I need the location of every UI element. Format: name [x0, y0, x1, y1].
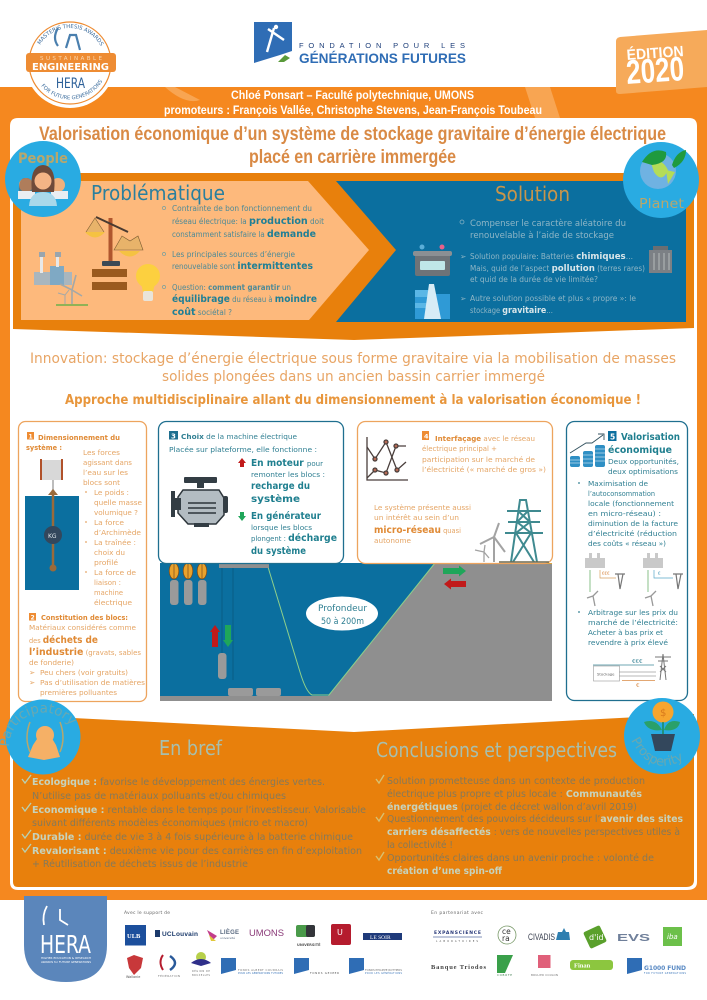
support logos: Avec le support de	[124, 910, 170, 916]
blocks constitution text: Matériaux considérés comme	[29, 623, 136, 632]
arbitrage text: Arbitrage sur les prix du	[588, 608, 678, 617]
icon: light bulb	[136, 264, 160, 301]
text: en bref list: Economique : rentable dans le temps pour l’investisseur. Valorisable	[32, 805, 366, 816]
support logos: UNIVERSITÉ	[297, 942, 321, 947]
heading text: Valorisation	[621, 432, 680, 443]
subheading: multidisciplinary approach: Approche multidisciplinaire allant du dimensionnement à la valorisation économique !	[65, 393, 641, 408]
heading text: 5	[610, 432, 615, 442]
mini diagram: storage arbitrage	[593, 654, 671, 689]
icon: battery	[413, 244, 452, 276]
forces text: électrique	[94, 598, 132, 607]
support logos: FÉDÉRATION	[158, 973, 180, 978]
solution text: Compenser le caractère aléatoire du	[470, 218, 626, 229]
icon: coin stacks	[570, 434, 605, 467]
icon: prosperity badge: $	[660, 708, 666, 719]
problem text	[162, 204, 324, 318]
icon: people badge	[5, 141, 81, 217]
heading text: économique	[608, 444, 672, 456]
motor mode text: En moteur pour	[251, 458, 324, 469]
generator mode text	[251, 511, 337, 557]
support logos: POUR LES GÉNÉRATIONS FUTURES	[238, 972, 284, 975]
forces text: machine	[94, 588, 123, 597]
partner logos: Banque Triodos	[431, 964, 486, 971]
blocks constitution text	[29, 613, 145, 697]
icon: people badge: People	[18, 151, 68, 167]
generator mode text: lorsque les blocs	[251, 523, 312, 532]
interface text: 4	[424, 432, 429, 440]
icon: participatory badge	[0, 700, 80, 774]
partner logos: Finan	[574, 962, 591, 970]
orange bottom section	[13, 714, 694, 887]
forces text	[83, 448, 142, 607]
text: conclusions list: la collectivité !	[387, 839, 453, 851]
interface text	[422, 431, 546, 474]
panel 3: machine choice: 3	[171, 432, 176, 440]
icon: planet badge	[623, 142, 699, 218]
support logos: ULB	[127, 933, 141, 940]
title: placé en carrière immergée	[249, 147, 456, 168]
logo: sustainable engineering award: SUSTAINABLE	[40, 56, 102, 62]
solution text: stockage gravitaire…	[470, 306, 553, 316]
logo: fondation pour les générations futures: GÉNÉRATIONS FUTURES	[299, 50, 466, 66]
mini diagram: storage arbitrage: Stockage	[597, 672, 615, 676]
blocks constitution text: de fonderie)	[29, 658, 74, 667]
forces text: Le poids :	[94, 488, 129, 497]
partner logos: FOR FUTURE GENERATIONS	[644, 972, 687, 975]
text: conclusions list: Solution prometteuse dans un contexte de production	[387, 776, 645, 787]
heading: problématique: Problématique	[91, 181, 225, 205]
panel 3: machine choice	[158, 422, 344, 564]
forces text: choix du	[94, 548, 125, 557]
support logos: LIÈGE	[220, 928, 239, 936]
logo: sustainable engineering award: FOR FUTURE GENERATIONS	[41, 80, 102, 100]
self-consumption text: diminution de la facture	[588, 519, 678, 528]
support logos: POUR LES GÉNÉRATIONS	[365, 972, 403, 975]
micro-grid text: micro-réseau quasi	[374, 524, 461, 536]
icon: turbines	[475, 523, 505, 562]
support logos: U	[337, 928, 343, 937]
text: en bref list: Revalorisant : deuxième vie pour des carrières en fin d’exploitation	[32, 845, 362, 857]
partner logos: ce	[502, 927, 511, 936]
forces text: volumique ?	[94, 508, 138, 517]
interface text: l’électricité (« marché de gros »)	[422, 465, 546, 474]
blocks constitution text: Constitution des blocs:	[41, 613, 128, 622]
mini diagrams: micro-grid flows	[585, 553, 683, 606]
micro-grid text: autonome	[374, 536, 411, 545]
heading: en bref: En bref	[159, 736, 223, 760]
text: en bref list: N’utilise pas de matériaux polluants et/ou chimiques	[32, 790, 286, 802]
icon: factory	[34, 252, 72, 285]
logo: fondation pour les générations futures: FONDATION POUR LES	[299, 41, 465, 50]
self-consumption text: des coûts « réseau »)	[588, 539, 666, 548]
text: conclusions list: énergétiques (projet de décret wallon d’avril 2019)	[387, 801, 637, 813]
panel 3: machine choice: Choix de la machine électrique	[181, 432, 297, 441]
motor mode text: système	[251, 493, 300, 505]
edition 2020 badge: ÉDITION	[626, 43, 684, 64]
icon: line chart	[367, 437, 408, 480]
arrow down green	[238, 512, 246, 521]
partner logos: En partenariat avec	[431, 910, 484, 916]
support logos: UCLouvain	[162, 931, 198, 938]
icon: wind turbine	[56, 275, 88, 305]
problem text: constamment satisfaire la demande	[172, 229, 316, 240]
partner logos: EXPANSCIENCE	[434, 930, 481, 936]
interface text: participation sur le marché de	[422, 455, 535, 464]
solution text: Solution populaire: Batteries chimiques…	[470, 252, 633, 262]
forces text: liaison :	[94, 578, 121, 587]
mini diagram: storage arbitrage: €€€	[632, 659, 643, 665]
forces text: agissant dans	[83, 458, 132, 467]
arbitrage text: marché de l’électricité:	[588, 618, 678, 627]
white main panel	[10, 118, 697, 890]
interface text: électrique principal +	[422, 444, 497, 453]
icon: trash	[649, 246, 672, 273]
heading text	[608, 431, 680, 476]
panel 1: dimensionnement and constitution: 1	[28, 434, 33, 440]
heading text: Deux opportunités,	[608, 457, 679, 466]
arbitrage text	[578, 608, 678, 647]
text: en bref list: Ecologique : favorise le développement des énergies vertes.	[32, 776, 325, 788]
text: conclusions list: carriers désaffectés : vers de nouvelles perspectives utiles à	[387, 826, 680, 838]
blocks constitution text: ➢	[29, 668, 35, 677]
self-consumption text: locale (fonctionnement	[588, 499, 674, 508]
heading: conclusions et perspectives: Conclusions et perspectives	[376, 738, 617, 762]
logo: fondation pour les générations futures	[254, 22, 466, 66]
authors	[164, 88, 542, 117]
forces text: La force de	[94, 568, 136, 577]
heading: solution: Solution	[495, 182, 570, 206]
support logos: FONDS GEIMER	[310, 971, 339, 975]
solution text: ➢	[460, 294, 466, 303]
forces text: profilé	[94, 558, 118, 567]
logo: sustainable engineering award: ENGINEERING	[32, 62, 109, 73]
problem text: Question: comment garantir un	[172, 283, 291, 292]
support logos	[124, 910, 403, 979]
text: conclusions list	[376, 775, 683, 877]
motor mode text	[251, 458, 325, 505]
edition 2020 badge	[616, 30, 707, 94]
generator mode text: En générateur	[251, 511, 321, 522]
icon: prosperity badge	[624, 698, 700, 774]
support logos: FONDS PHILIPPE ROTTIERS	[365, 968, 402, 972]
solution text: ➢	[460, 252, 466, 261]
text: conclusions list: Questionnement des pouvoirs décideurs sur l’avenir des sites	[387, 813, 683, 825]
panel 1: dimensionnement and constitution: système :	[26, 443, 62, 452]
mini diagram: storage arbitrage: €	[636, 683, 640, 689]
icon: prosperity badge: Prosperity	[632, 736, 682, 766]
innovation statement	[30, 351, 676, 385]
motor mode text: remonter les blocs :	[251, 470, 325, 479]
title	[39, 124, 666, 168]
panel 3: machine choice: Placée sur plateforme, elle fonctionne :	[169, 445, 317, 454]
partner logos	[431, 910, 687, 977]
innovation statement: solides plongées dans un ancien bassin carrier immergé	[162, 369, 545, 385]
callout: depth: 50 à 200m	[321, 617, 364, 627]
panel 5: economic valorisation	[566, 422, 688, 700]
text: en bref list: + Réutilisation de déchets issus de l’industrie	[32, 858, 248, 870]
forces text: La traînée :	[94, 538, 136, 547]
self-consumption text: d’électricité (réduction	[588, 529, 677, 538]
support logos: Wallonie	[126, 975, 140, 979]
support logos: FONDS ALBERT COUDRAIS	[238, 968, 283, 972]
logo: sustainable engineering award	[26, 21, 116, 108]
panel 1: dimensionnement and constitution: Dimensionnement du	[38, 433, 120, 442]
panel: problématique	[21, 181, 369, 320]
icon: dam	[415, 284, 450, 319]
forces text: blocs sont	[83, 478, 120, 487]
panel: solution	[336, 181, 686, 322]
heading text: deux optimisations	[608, 467, 678, 476]
blocks constitution text: Pas d’utilisation de matières	[40, 678, 145, 687]
self-consumption text: Maximisation de	[588, 479, 648, 488]
problem text: Les principales sources d’énergie	[172, 250, 295, 259]
mini diagram: block in water	[25, 459, 79, 590]
arrow up red	[238, 458, 246, 467]
solution text: Mais, quid de l’aspect pollution (terres rares)	[470, 264, 645, 274]
innovation statement: Innovation: stockage d’énergie électrique sous forme gravitaire via la mobilisation de masses	[30, 351, 676, 367]
callout: depth	[306, 596, 378, 630]
text: en bref list: suivant différents modèles économiques (micro et macro)	[32, 817, 308, 829]
text: conclusions list: électrique plus propre et plus locale : Communautés	[387, 788, 642, 800]
authors: promoteurs : François Vallée, Christophe Stevens, Jean-François Toubeau	[164, 103, 542, 117]
blocks constitution text: l’industrie (gravats, sables	[29, 647, 141, 658]
solution text	[460, 218, 645, 316]
problem text: réseau électrique: la production doit	[172, 216, 324, 227]
panel 4: grid interface	[358, 422, 552, 564]
support logos: RÉGION DE	[192, 968, 210, 973]
forces text: La force	[94, 518, 124, 527]
self-consumption text: l’autoconsommation	[588, 489, 655, 498]
hera shield: AWARDS for FUTURE GENERATIONS	[41, 960, 91, 964]
edition 2020 badge: 2020	[625, 50, 685, 92]
generator mode text: du système	[251, 545, 306, 557]
text: conclusions list: création d’une spin-off	[387, 865, 503, 877]
problem text: renouvelable sont intermittentes	[172, 261, 313, 272]
micro-grid text: Le système présente aussi	[374, 503, 471, 512]
partner logos: CIVADIS	[528, 932, 555, 942]
mini diagrams: micro-grid flows: €€€	[602, 571, 610, 576]
text: en bref list: Durable : durée de vie 3 à 4 fois supérieure à la batterie chimique	[32, 831, 353, 843]
callout: depth: Profondeur	[318, 604, 367, 614]
orange band behind problem and solution	[13, 173, 694, 340]
partner logos: iba	[667, 933, 678, 941]
partner logos: LABORATOIRES	[436, 939, 478, 943]
partner logos: EVS	[617, 932, 650, 944]
arbitrage text: Acheter à bas prix et	[588, 628, 663, 637]
self-consumption text: en micro-réseau) :	[588, 509, 661, 518]
text: en bref list	[22, 775, 366, 870]
logo: sustainable engineering award: HERA	[56, 76, 85, 92]
icon: planet badge: Planet	[639, 197, 684, 212]
mini diagram: block in water: KG	[48, 533, 57, 540]
motor mode text: recharge du	[251, 481, 310, 492]
blocks constitution text: des déchets de	[29, 634, 98, 646]
logo: sustainable engineering award: MASTER'S THESIS AWARDS	[37, 24, 104, 46]
blocks constitution text: ➢	[29, 678, 35, 687]
self-consumption text	[578, 479, 678, 548]
micro-grid text	[374, 503, 471, 545]
text: conclusions list: Opportunités claires dans un avenir proche : volonté de	[387, 852, 654, 864]
support logos: BRUXELLES	[192, 973, 210, 977]
blocks constitution text: premières polluantes	[40, 688, 117, 697]
problem text: équilibrage du réseau à moindre	[172, 293, 317, 305]
micro-grid text: un intérêt au sein d’un	[374, 513, 459, 522]
solution text: renouvelable à l’aide de stockage	[470, 231, 614, 241]
generator mode text: plongent : décharge	[251, 532, 337, 544]
forces text: l’eau sur les	[83, 468, 128, 477]
hera shield	[24, 896, 107, 982]
partner logos: d'id	[589, 933, 604, 942]
icon: pylon	[499, 500, 549, 562]
hera shield: HIGHER EDUCATION & RESEARCH	[41, 956, 91, 960]
forces text: d’Archimède	[94, 528, 141, 537]
support logos: université	[220, 936, 235, 940]
partner logos: G1000 FUND	[644, 965, 686, 972]
solution text: Autre solution possible et plus « propre »: le	[470, 294, 636, 303]
blocks constitution text: 2	[30, 614, 35, 622]
support logos: LE SOIR	[370, 935, 391, 941]
partner logos: ra	[502, 934, 510, 943]
support logos: UMONS	[249, 928, 284, 939]
icon: balance	[85, 217, 143, 290]
problem text: coût sociétal ?	[172, 306, 232, 318]
mini diagrams: micro-grid flows: €	[658, 571, 661, 576]
icon: motor	[171, 477, 228, 527]
interface text: Interfaçage avec le réseau	[435, 434, 535, 443]
panel 1: dimensionnement and constitution	[18, 422, 146, 702]
blocks constitution text: Peu chers (voir gratuits)	[40, 668, 128, 677]
forces text: Les forces	[83, 448, 120, 457]
problem text: Contrainte de bon fonctionnement du	[172, 204, 312, 213]
partner logos: BRULIER COULON	[531, 973, 558, 977]
hera shield: HERA	[40, 930, 91, 959]
forces text: quelle masse	[94, 498, 142, 507]
arbitrage text: revendre à prix élevé	[588, 638, 668, 647]
authors: Chloé Ponsart – Faculté polytechnique, UMONS	[231, 88, 474, 102]
partner logos: COBOTE	[497, 973, 512, 977]
solution text: et quid de la durée de vie limitée?	[470, 275, 598, 284]
chart: quarry diagram	[160, 560, 552, 701]
